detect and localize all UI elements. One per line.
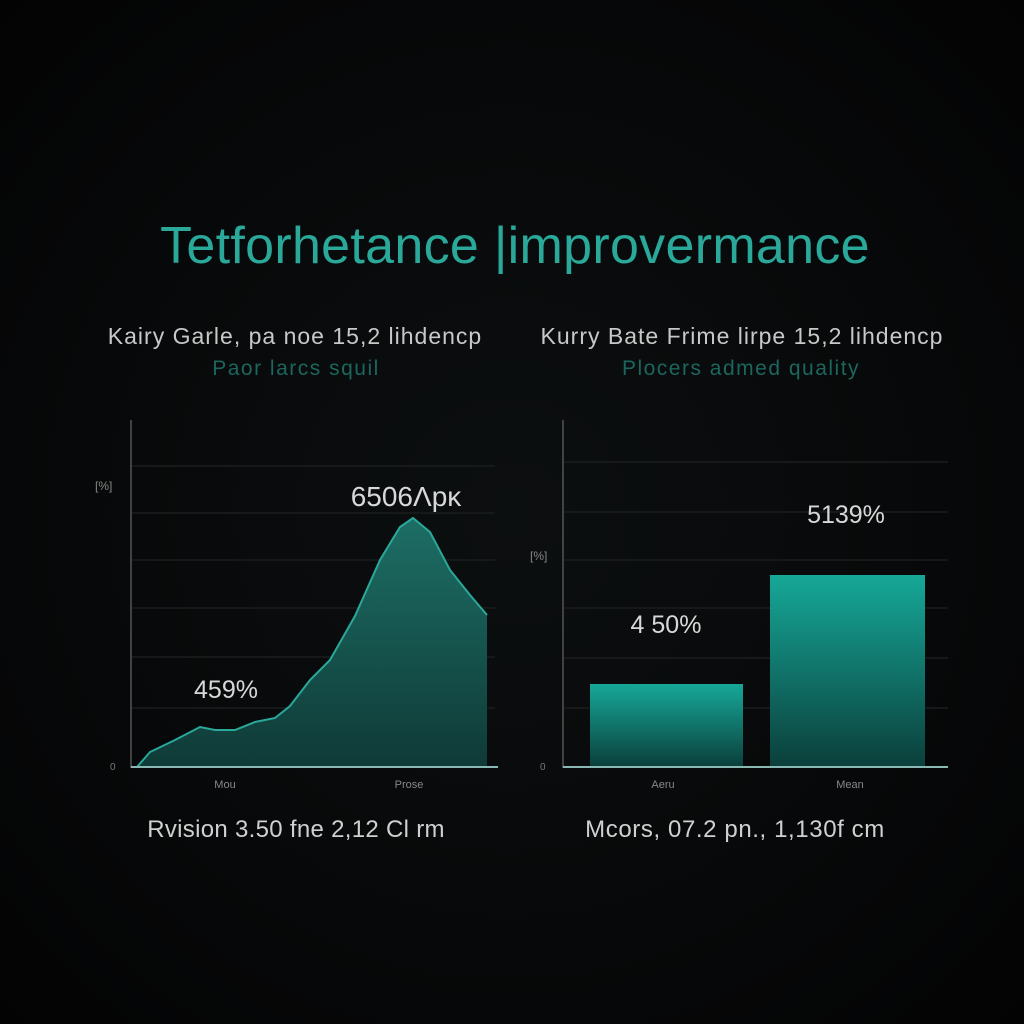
area chart: Prose (395, 779, 423, 791)
bar chart: Aeru (651, 779, 675, 791)
subtitle right secondary: Plocers admed quality (622, 357, 860, 380)
bar chart: 4 50% (631, 611, 701, 639)
subtitle left: Kairy Garle, pa noe 15,2 lihdencp (108, 323, 482, 349)
caption left: Rvision 3.50 fne 2,12 Cl rm (147, 816, 445, 843)
bar chart: [%] (530, 549, 547, 563)
area chart: [%] (95, 479, 112, 493)
area chart: Mou (214, 779, 236, 791)
bar chart: Mean (836, 779, 864, 791)
subtitle right: Kurry Bate Frime lirpe 15,2 lihdencp (541, 323, 943, 349)
bar chart: 0 (540, 762, 546, 773)
bar chart: 5139% (807, 501, 885, 529)
title: Tetforhetance |improvermance (160, 217, 870, 275)
area chart: 459% (194, 676, 258, 704)
subtitle left secondary: Paor larcs squil (212, 357, 380, 380)
area chart: 6506Λpκ (351, 481, 462, 512)
caption right: Mcors, 07.2 pn., 1,130f cm (585, 816, 885, 843)
area chart: 0 (110, 762, 116, 773)
